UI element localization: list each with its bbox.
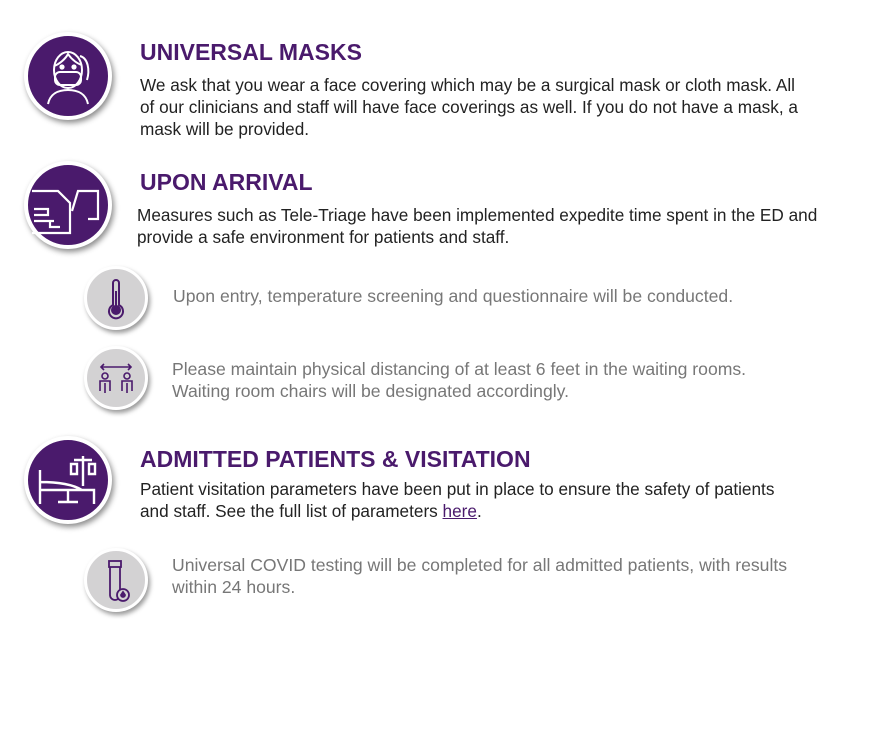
text: distancing <box>172 359 746 401</box>
text: temperature: Upon entry, temperature screening and questionnaire will be conducted. <box>173 286 733 306</box>
heading: upon arrival: UPON ARRIVAL <box>140 169 312 195</box>
icon: masked face <box>24 32 112 120</box>
icon: hospital bed <box>24 436 112 524</box>
text: masks: We ask that you wear a face covering which may be a surgical mask or cloth mask. All of our clinicians and staff will have face coverings as well. If you do not have a mask, a mask will be provided. <box>140 75 798 139</box>
text: distancing: Please maintain physical distancing of at least 6 feet in the waiting rooms. <box>172 359 746 379</box>
icon: thermometer <box>84 266 148 330</box>
text: visitation: Patient visitation parameters have been put in place to ensure the safety of patients and staff. See the full list of parameters here. <box>140 479 774 521</box>
heading: admitted patients: ADMITTED PATIENTS & VISITATION <box>140 446 531 472</box>
text: distancing: Waiting room chairs will be designated accordingly. <box>172 381 569 401</box>
icon: test tube <box>84 548 148 612</box>
text: covid testing: Universal COVID testing will be completed for all admitted patients, with results within 24 hours. <box>172 555 787 597</box>
icon: distancing <box>84 346 148 410</box>
icon: car <box>24 161 112 249</box>
text: arrival: Measures such as Tele-Triage have been implemented expedite time spent in the ED and provide a safe environment for patients and staff. <box>137 205 817 247</box>
heading: universal masks: UNIVERSAL MASKS <box>140 39 362 65</box>
